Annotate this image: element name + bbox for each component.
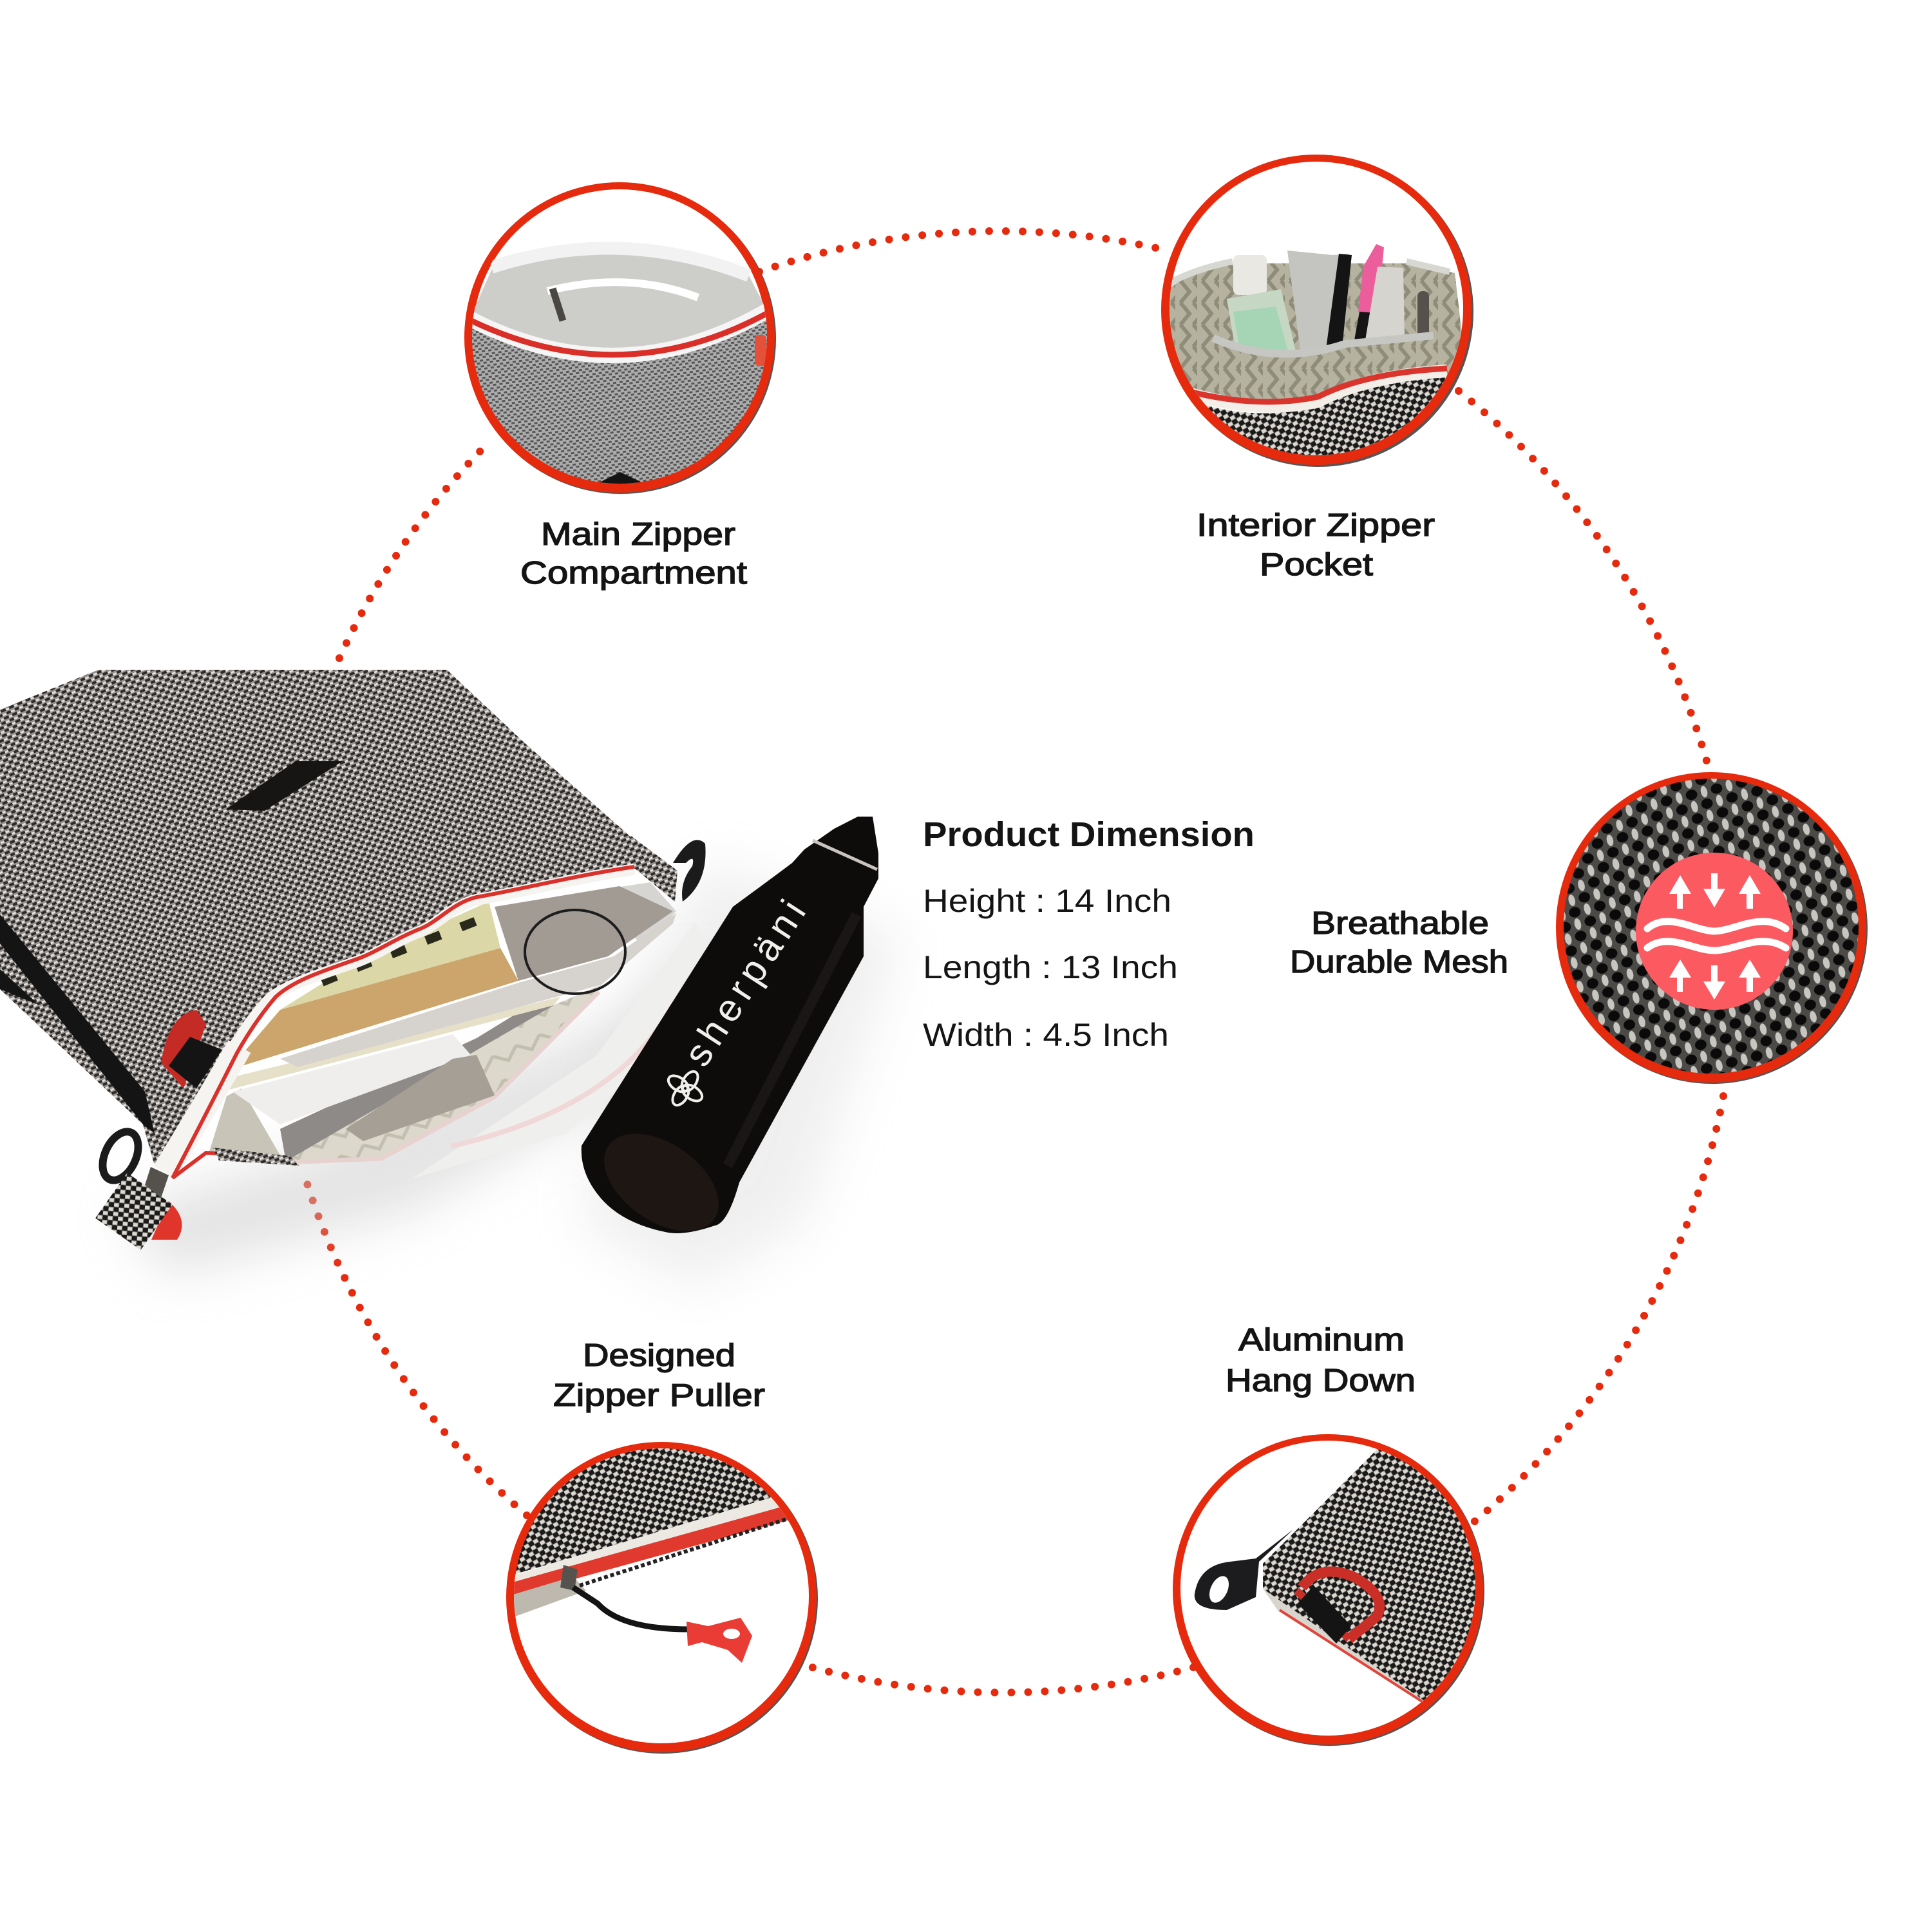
sanitizer bottle [1227,255,1296,350]
label: Breathable Durable Mesh: Breathable [1311,906,1489,941]
panel: aluminum hang down circle [1173,1434,1484,1746]
label: Designed Zipper Puller [553,1338,765,1413]
cord [573,1587,689,1629]
contents: phone [346,1055,495,1141]
right hook [673,840,706,902]
shadows under bag and bottle [122,863,902,1288]
contents: cream page [223,997,560,1090]
label: Interior Zipper Pocket [1197,508,1435,582]
panel: product dimensions: Product Dimension [923,815,1255,854]
label: Aluminum Hang Down: Aluminum [1238,1323,1405,1358]
black hook [1195,1530,1293,1610]
label: Breathable Durable Mesh [1290,906,1508,980]
bag photo [0,670,708,1250]
panel: product dimensions: Height : 14 Inch [923,883,1171,919]
label: Aluminum Hang Down [1226,1323,1416,1398]
black strap [0,914,155,1133]
bottle logo [659,1062,712,1115]
dotted ring connecting the feature circles [307,231,1723,1692]
bottle body [582,817,878,1233]
panel: product dimensions: Width : 4.5 Inch [923,1017,1169,1053]
brand patch [225,761,343,811]
grey device [1365,267,1405,344]
panel: main zipper compartment circle [460,182,779,515]
panel: product dimensions [923,815,1255,1053]
lower left hook [95,1126,146,1186]
panel: breathable durable mesh circle [1556,772,1868,1084]
fabric lower strip [213,1148,299,1166]
lining left [209,1088,280,1155]
label: Main Zipper Compartment: Main Zipper [541,517,735,552]
contents: top magazine behind [586,882,676,947]
contents: white magazine [232,1034,471,1124]
contents: magazine pages [280,1005,554,1161]
ghost reflection [412,921,708,1179]
bag body [0,670,676,1166]
red zipper tape [173,867,634,1178]
label: Designed Zipper Puller: Zipper Puller [553,1378,765,1413]
panel: product dimensions: Length : 13 Inch [923,949,1178,985]
label: Aluminum Hang Down: Hang Down [1226,1363,1416,1398]
contents: book cover [280,902,500,1010]
red D ring and tab [161,1010,222,1088]
phone [1287,251,1349,350]
label: Main Zipper Compartment: Compartment [520,556,747,591]
contents: tablet [280,913,676,1067]
red puller [687,1618,752,1663]
bottle brand text: sherpäni [676,893,814,1074]
main zipper strip [203,869,634,1097]
main zipper strip lower [165,1046,240,1172]
zipper slider [560,1565,578,1591]
black strap lower [0,969,39,1005]
bottle highlight [728,914,857,1166]
cap ring [813,840,877,869]
bag tail [631,836,677,902]
icon: breathable airflow [1636,853,1793,1010]
pink pen [1354,244,1384,339]
zipper tag [95,1167,182,1250]
contents: glasses [525,910,625,994]
water bottle [582,817,878,1251]
label: Interior Zipper Pocket: Interior Zipper [1197,508,1435,543]
label: Designed Zipper Puller: Designed [583,1338,735,1373]
bottle base [587,1113,736,1251]
lining lower [280,985,601,1161]
label: Main Zipper Compartment [520,517,747,591]
contents: book pages [238,948,518,1065]
red D ring [1296,1571,1379,1643]
panel: interior zipper pocket circle [1159,155,1473,473]
label: Breathable Durable Mesh: Durable Mesh [1290,945,1508,980]
contents: device back [495,886,673,981]
panel: designed zipper puller circle [502,1436,818,1754]
label: Interior Zipper Pocket: Pocket [1260,547,1373,582]
